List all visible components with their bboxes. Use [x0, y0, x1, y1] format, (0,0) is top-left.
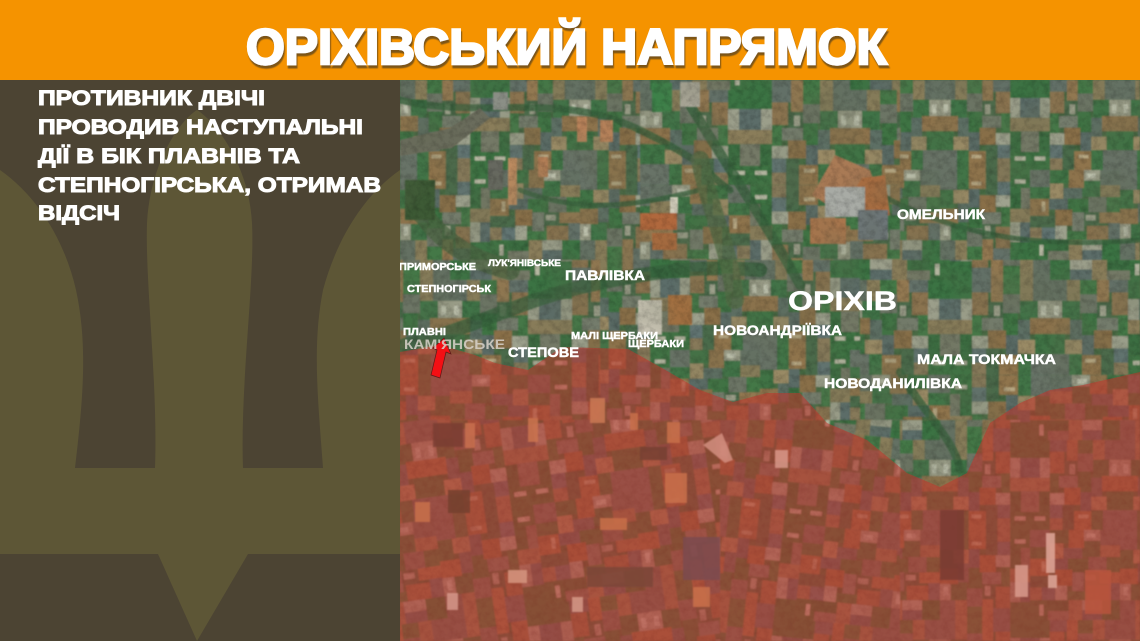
prominent fields	[400, 82, 890, 335]
text: summary: ПРОТИВНИК ДВІЧІ	[38, 87, 265, 110]
header bar	[0, 0, 1140, 80]
green wash	[400, 80, 1140, 641]
place labels: ЛУК'ЯНІВСЬКЕ	[488, 258, 561, 269]
text: summary: ВІДСІЧ	[38, 202, 120, 225]
occupied territory overlay	[400, 345, 1140, 641]
left panel	[0, 80, 400, 641]
dark green valleys	[400, 100, 1140, 470]
place labels: ПЛАВНІ	[403, 327, 446, 338]
place labels: ОРІХІВ	[788, 286, 897, 316]
place labels: СТЕПНОГІРСЬК	[407, 284, 492, 295]
place labels: НОВОДАНИЛІВКА	[824, 375, 962, 391]
place labels: ПРИМОРСЬКЕ	[399, 262, 476, 273]
text: summary: ДІЇ В БІК ПЛАВНІВ ТА	[38, 145, 300, 168]
place labels: ЩЕРБАКИ	[628, 338, 684, 350]
place labels: МАЛА ТОКМАЧКА	[917, 351, 1056, 367]
large scale shading	[400, 81, 1140, 534]
place labels	[399, 207, 1056, 391]
title: ОРІХІВСЬКИЙ НАПРЯМОК	[246, 18, 887, 75]
place labels: ПАВЛІВКА	[565, 267, 645, 283]
farm fields	[400, 80, 1140, 641]
arrow: enemy attack	[431, 338, 451, 378]
text: summary: СТЕПНОГІРСЬКА, ОТРИМАВ	[38, 174, 381, 197]
place labels: ОМЕЛЬНИК	[897, 207, 986, 222]
place labels: КАМ'ЯНСЬКЕ	[404, 336, 505, 352]
texture grain	[400, 80, 1140, 641]
text: summary: ПРОВОДИВ НАСТУПАЛЬНІ	[38, 116, 363, 139]
place labels: МАЛІ ЩЕРБАКИ	[571, 330, 658, 342]
place labels: СТЕПОВЕ	[508, 344, 579, 360]
occupied fields	[415, 398, 1111, 614]
place labels: НОВОАНДРІЇВКА	[713, 322, 842, 338]
text: summary	[38, 87, 381, 225]
satellite map	[399, 80, 1140, 641]
icon: trident emblem	[0, 110, 400, 641]
